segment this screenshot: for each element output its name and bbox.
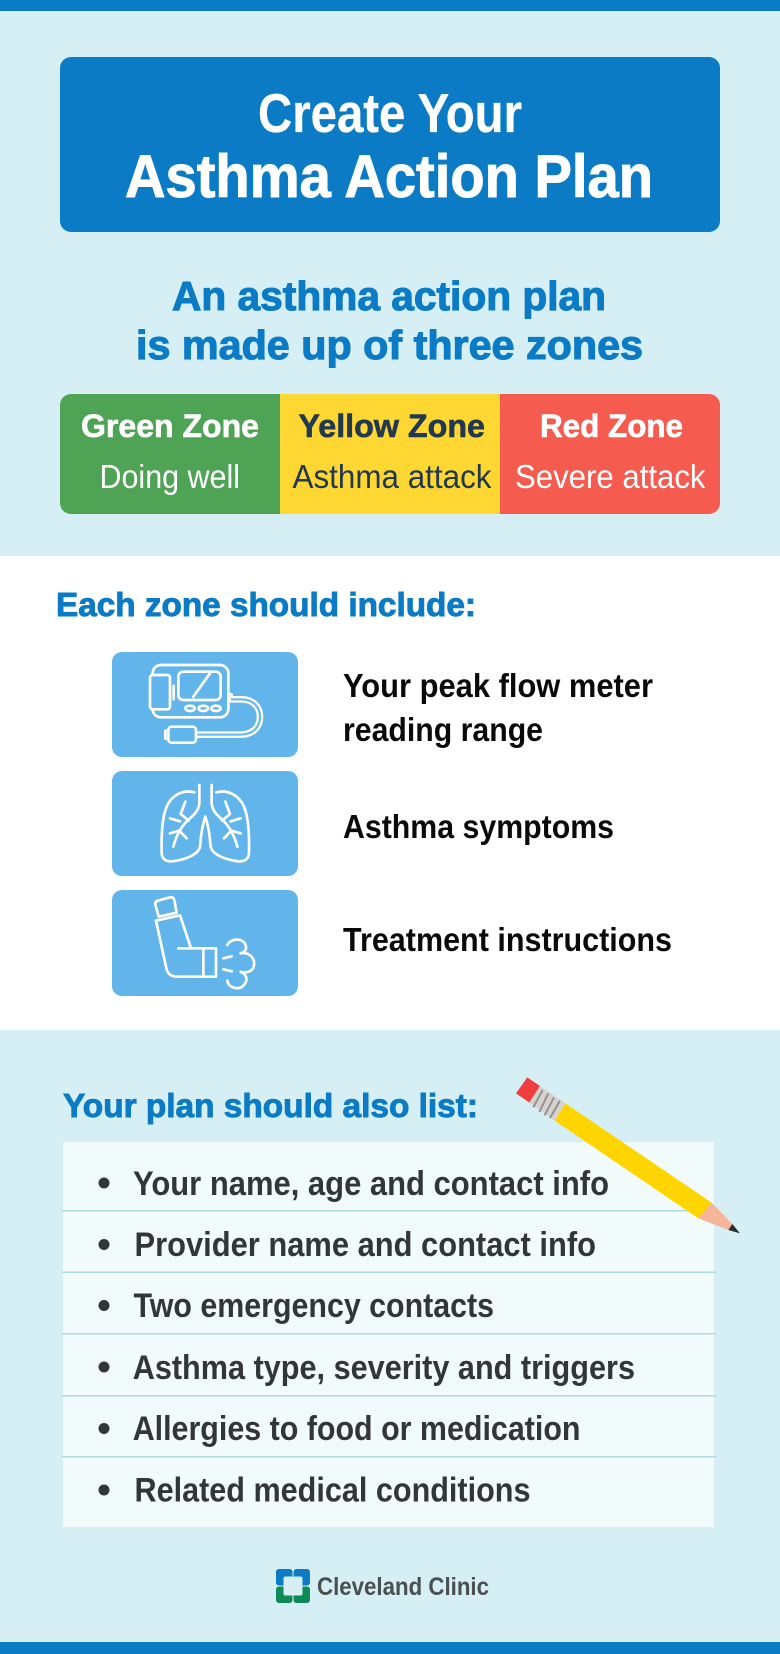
subtitle: An asthma action plan [172, 273, 606, 319]
zone: yellow: Yellow Zone [298, 408, 485, 444]
list item: allergies: Allergies to food or medication [133, 1410, 580, 1448]
panel: title banner [60, 57, 720, 232]
list item: asthma type: Asthma type, severity and triggers [133, 1349, 635, 1387]
text: peak flow meter reading range: reading range [343, 711, 543, 748]
icon: pencil [516, 1077, 740, 1233]
zone: red: Red Zone [540, 408, 683, 444]
panel: three zones [60, 394, 720, 514]
text: peak flow meter reading range [343, 667, 653, 748]
text: peak flow meter reading range: Your peak flow meter [343, 667, 653, 704]
subtitle: is made up of three zones [136, 322, 643, 368]
zone: yellow [280, 394, 500, 514]
zone: green: Doing well [100, 458, 240, 495]
logo: Cleveland Clinic [276, 1569, 489, 1603]
list item: provider: Provider name and contact info [134, 1226, 596, 1264]
icon: logo cross [276, 1569, 310, 1603]
zone: green [60, 394, 280, 514]
text: asthma symptoms: Asthma symptoms [343, 808, 614, 845]
logo: Cleveland Clinic: Cleveland Clinic [317, 1573, 489, 1601]
title [125, 82, 653, 210]
list item: related conditions: Related medical conditions [134, 1472, 530, 1510]
zone: red: Severe attack [515, 458, 706, 495]
zone: green: Green Zone [81, 408, 259, 444]
icon: peak flow meter [112, 652, 298, 757]
icon: inhaler [112, 890, 298, 996]
zone: yellow: Asthma attack [292, 458, 492, 495]
list item: emergency contacts: Two emergency contacts [134, 1287, 494, 1325]
title: Asthma Action Plan [125, 143, 653, 210]
icon: lungs [112, 771, 298, 876]
heading: each zone: Each zone should include: [56, 586, 476, 623]
text: treatment instructions: Treatment instructions [343, 921, 672, 958]
subtitle [136, 273, 643, 368]
list item: name: Your name, age and contact info [133, 1165, 609, 1203]
heading: plan should also list: Your plan should also list: [63, 1087, 478, 1124]
zone: red [500, 394, 720, 514]
title: Create Your [258, 82, 522, 144]
panel: checklist [62, 1142, 716, 1527]
